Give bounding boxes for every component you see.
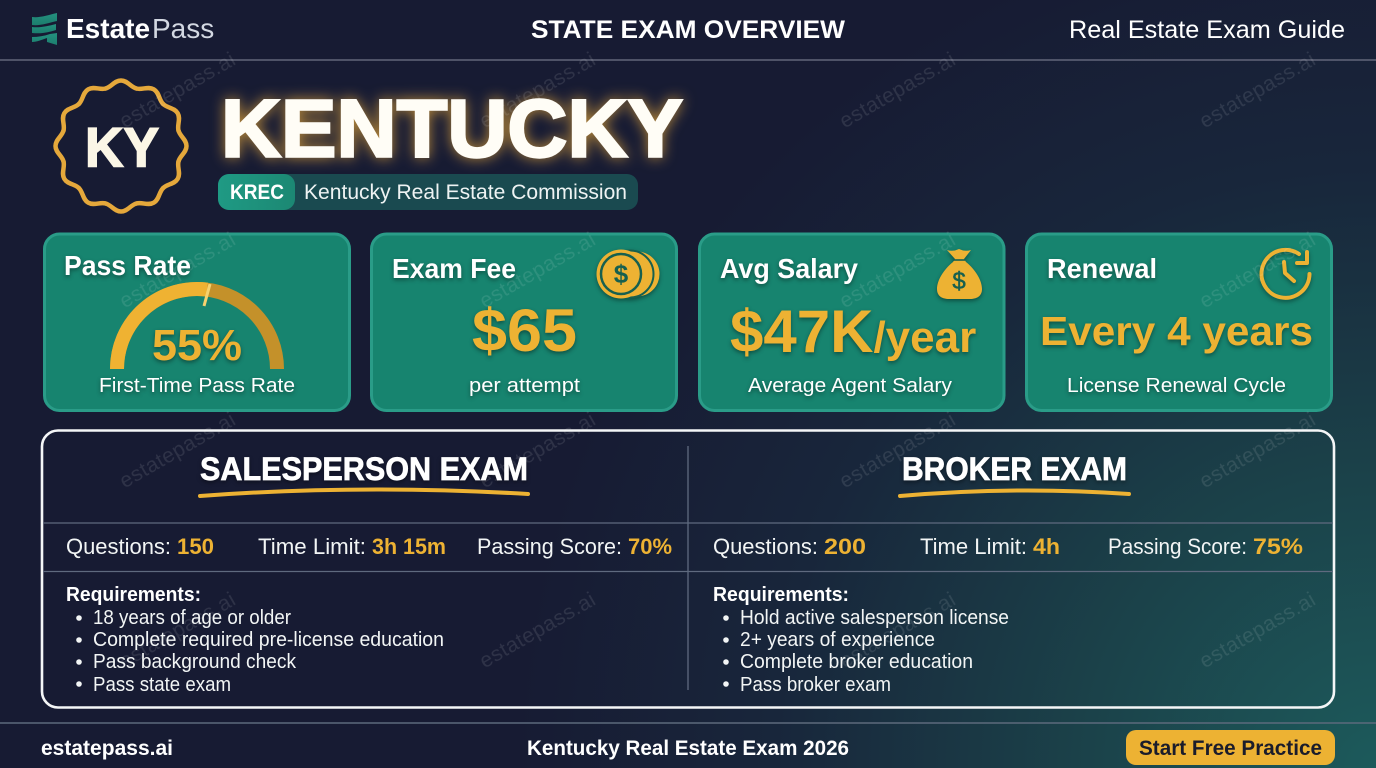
gauge: 55 percent: [117, 284, 277, 369]
heading underline: [200, 489, 528, 496]
icon: KY state badge: KY: [85, 116, 159, 178]
fee value: $65: [472, 297, 577, 364]
icon: clock with renewal arrow: [1262, 250, 1310, 298]
header guide label: Real Estate Exam Guide: [1069, 16, 1345, 44]
watermarks: estatepass.ai: [116, 408, 240, 493]
watermarks: estatepass.ai: [116, 228, 240, 313]
button: start free practice: Start Free Practice: [1139, 737, 1322, 760]
icon: coins: [596, 250, 660, 298]
caption: Average Agent Salary: [748, 375, 952, 397]
watermarks: estatepass.ai: [836, 228, 960, 313]
stat: passing score: Passing Score:: [1108, 534, 1247, 559]
requirements list: Hold active salesperson license: [740, 607, 1009, 629]
stat: passing score: Passing Score:: [477, 534, 622, 559]
icon: money bag: [937, 249, 982, 299]
requirements list: 2+ years of experience: [740, 629, 935, 651]
panel: exam comparison: [42, 430, 1334, 708]
stat: time limit: 3h 15m: [372, 534, 446, 559]
header: [32, 13, 1345, 46]
watermarks: [116, 48, 1320, 673]
icon: money bag: $: [952, 268, 966, 295]
stat: passing score: 75%: [1253, 534, 1303, 559]
caption: License Renewal Cycle: [1067, 375, 1286, 397]
requirements list: Complete broker education: [740, 651, 973, 673]
header title: STATE EXAM OVERVIEW: [531, 16, 845, 44]
watermarks: estatepass.ai: [476, 48, 600, 133]
brand name: Estate: [66, 13, 150, 44]
requirements list: Requirements:: [713, 584, 849, 606]
gauge value: 55%: [152, 321, 242, 370]
watermarks: estatepass.ai: [116, 588, 240, 673]
stat: questions: 150: [177, 534, 214, 559]
watermarks: estatepass.ai: [836, 48, 960, 133]
caption: First-Time Pass Rate: [99, 375, 295, 397]
requirements list: Complete required pre-license education: [93, 629, 444, 651]
section: salesperson exam: [66, 451, 672, 696]
renewal value: Every 4 years: [1040, 308, 1313, 354]
card heading: avg salary: Avg Salary: [720, 253, 858, 284]
salary value: $47K/year: [730, 298, 976, 365]
requirements list: [713, 584, 1009, 696]
watermarks: estatepass.ai: [1196, 588, 1320, 673]
stat: time limit: Time Limit:: [258, 534, 366, 559]
icon: EstatePass logo: [32, 13, 57, 46]
footer title: Kentucky Real Estate Exam 2026: [527, 737, 849, 760]
watermarks: estatepass.ai: [1196, 408, 1320, 493]
card heading: exam fee: Exam Fee: [392, 253, 516, 284]
stat: time limit: 4h: [1033, 534, 1060, 559]
card heading: pass rate: Pass Rate: [64, 250, 191, 281]
commission pill: [218, 174, 638, 210]
requirements list: Pass broker exam: [740, 674, 891, 696]
watermarks: estatepass.ai: [1196, 48, 1320, 133]
requirements list: [66, 584, 444, 696]
stat: questions: Questions:: [66, 534, 171, 559]
stat: questions: 200: [824, 534, 866, 559]
requirements list: Requirements:: [66, 584, 201, 606]
requirements list: Pass state exam: [93, 674, 231, 696]
watermarks: estatepass.ai: [476, 228, 600, 313]
watermarks: estatepass.ai: [1196, 228, 1320, 313]
watermarks: estatepass.ai: [836, 408, 960, 493]
requirements list: 18 years of age or older: [93, 607, 291, 629]
watermarks: estatepass.ai: [476, 408, 600, 493]
panel: exam fee card: [372, 234, 676, 410]
brand name: Pass: [152, 13, 214, 44]
icon: coins: $: [614, 259, 629, 289]
heading: salesperson exam: SALESPERSON EXAM: [200, 451, 528, 487]
panel: pass rate card: [44, 234, 350, 410]
stat: passing score: 70%: [628, 534, 672, 559]
panel: average salary card: [700, 234, 1004, 410]
caption: per attempt: [469, 375, 580, 397]
footer: [41, 730, 1335, 765]
section: broker exam: [713, 451, 1303, 696]
stat: time limit: Time Limit:: [920, 534, 1027, 559]
watermarks: estatepass.ai: [116, 48, 240, 133]
heading underline: [900, 490, 1129, 496]
state title: KENTUCKY: [221, 84, 683, 174]
commission pill: Kentucky Real Estate Commission: [304, 181, 627, 204]
icon: KY state badge: [56, 80, 186, 212]
requirements list: Pass background check: [93, 651, 297, 673]
heading: broker exam: BROKER EXAM: [902, 451, 1127, 487]
watermarks: estatepass.ai: [836, 588, 960, 673]
commission pill: KREC: [230, 181, 284, 204]
panel: renewal card: [1026, 234, 1332, 410]
button: start free practice: [1126, 730, 1335, 765]
card heading: renewal: Renewal: [1047, 253, 1157, 284]
footer site name: estatepass.ai: [41, 737, 173, 760]
stat: questions: Questions:: [713, 534, 818, 559]
watermarks: estatepass.ai: [476, 588, 600, 673]
